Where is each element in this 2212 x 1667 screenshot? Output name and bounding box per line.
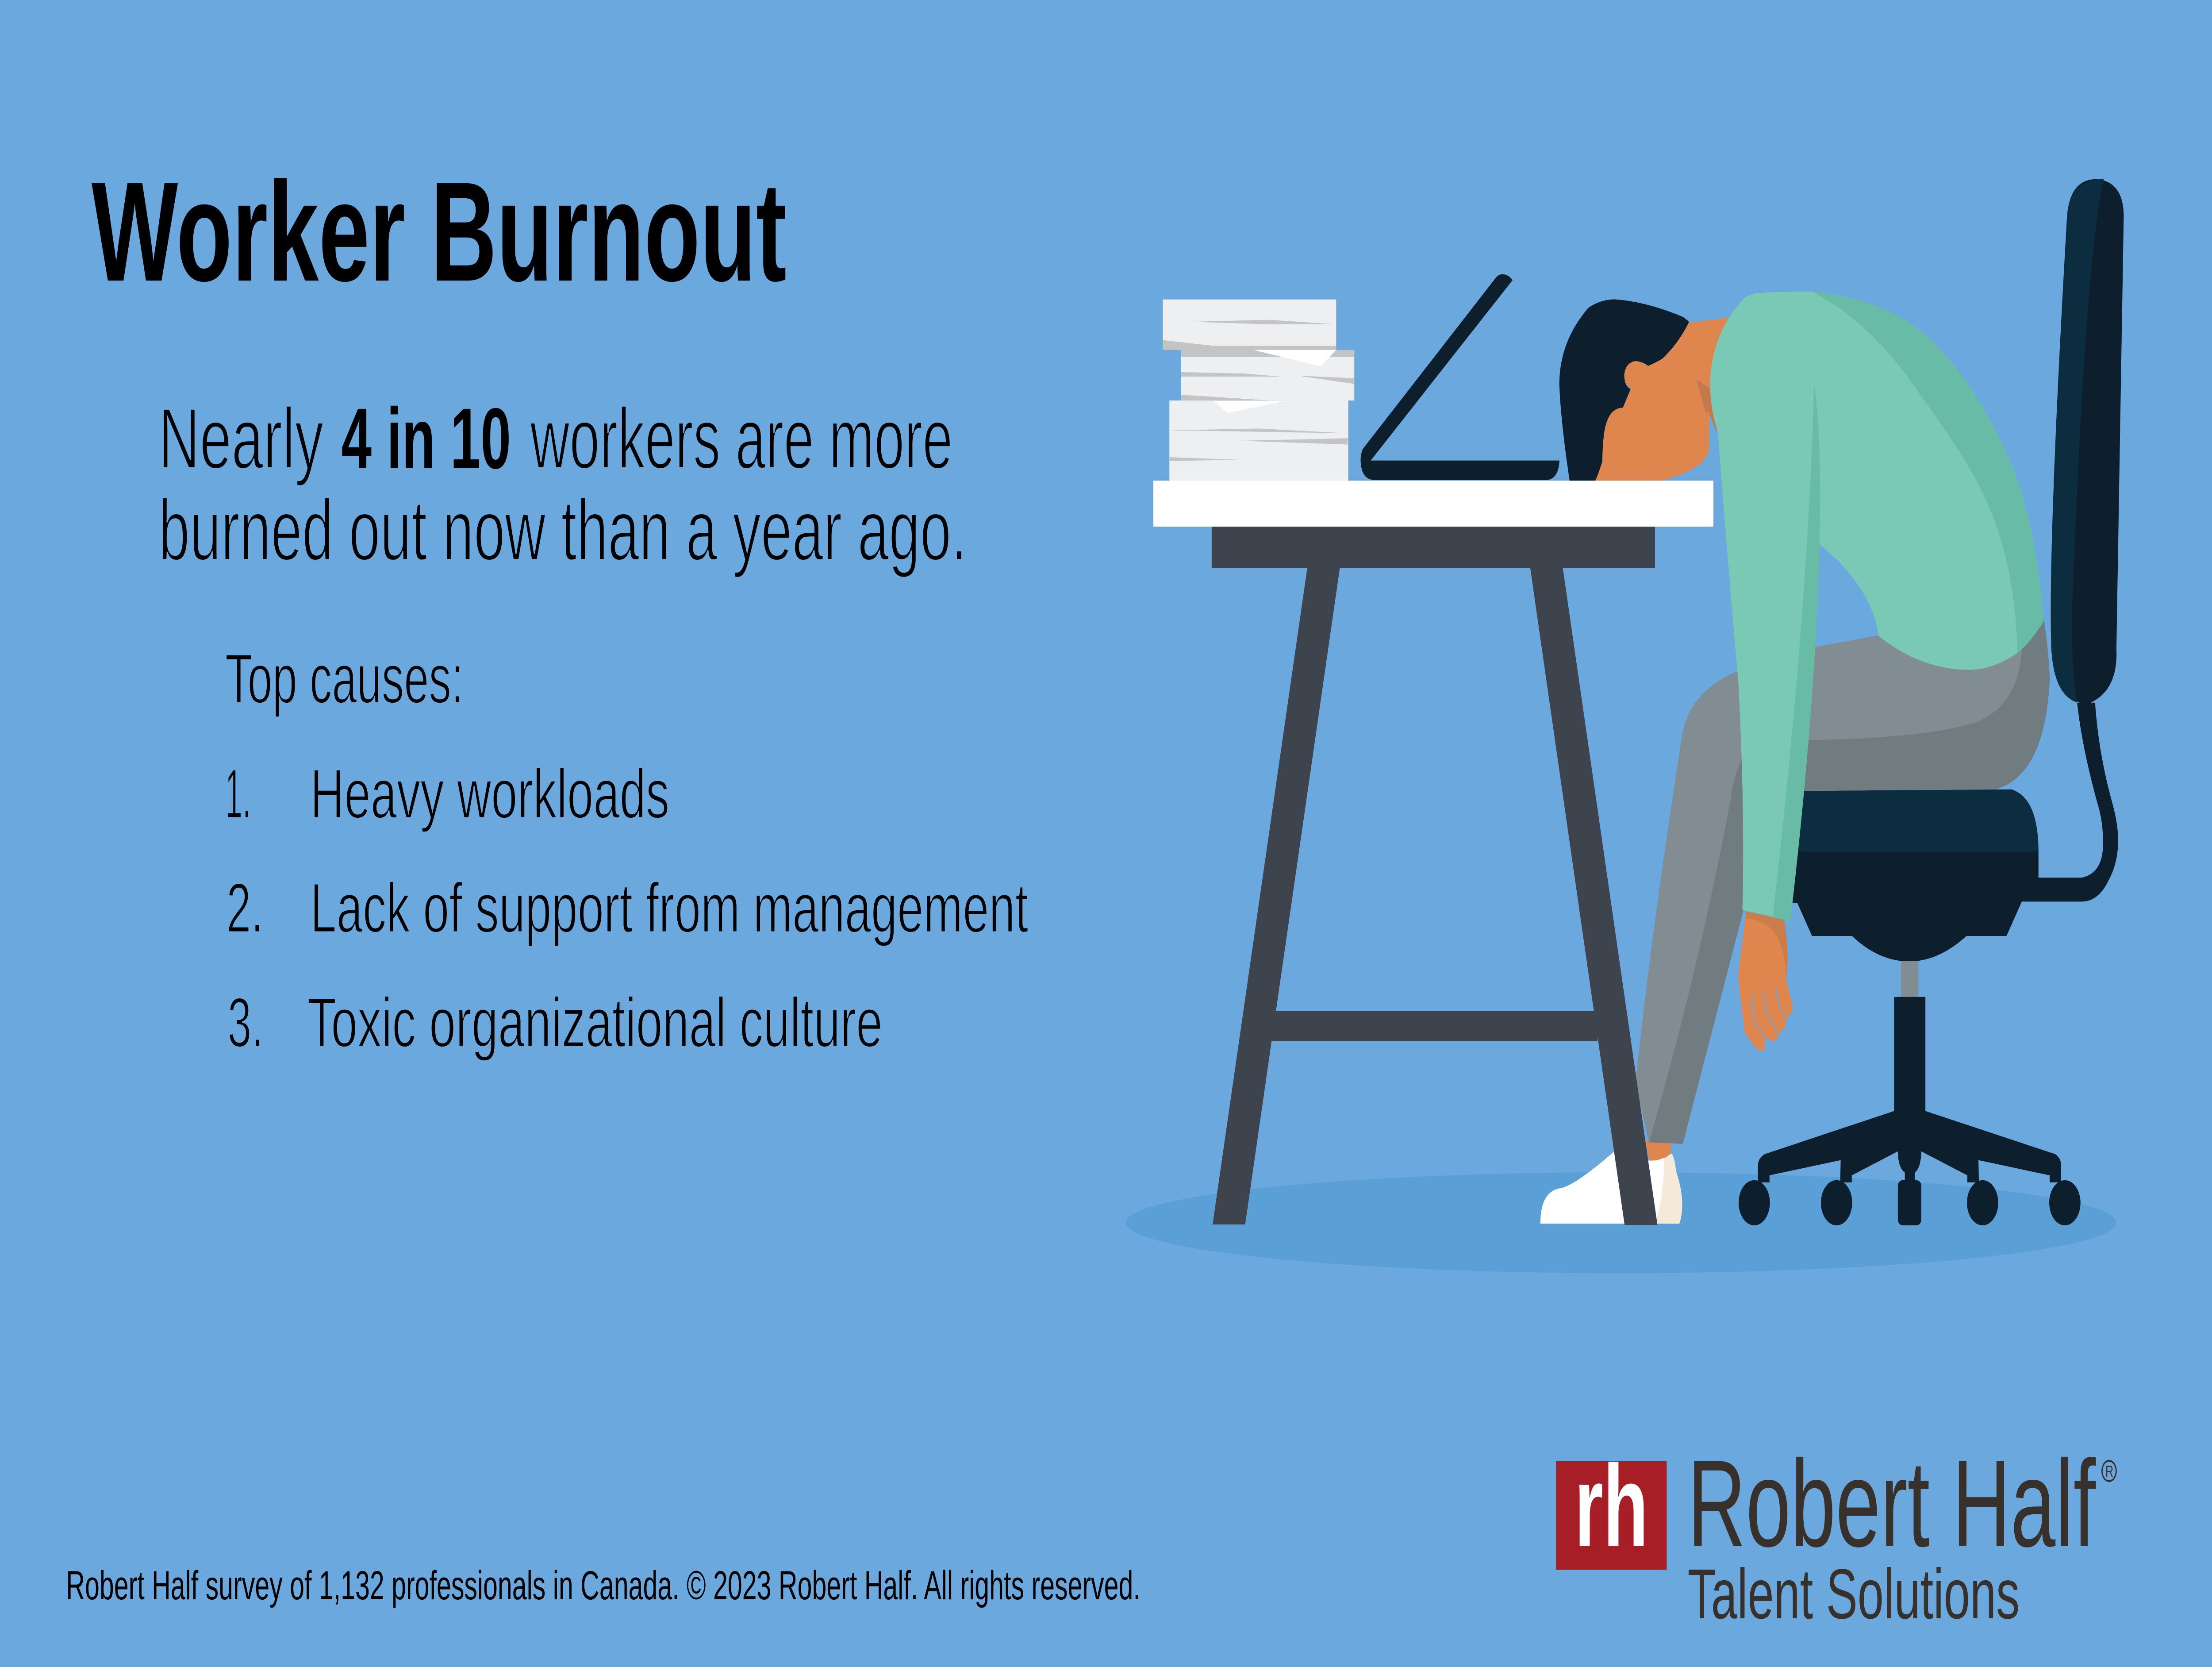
chair seat and arm support bbox=[1792, 703, 2118, 962]
headline statistic text: burned out now than a year ago. bbox=[158, 481, 967, 578]
green sweater bbox=[1710, 292, 2043, 921]
top causes list bbox=[225, 639, 1028, 1062]
office chair bbox=[1739, 179, 2124, 1225]
head and hair bbox=[1559, 300, 1731, 481]
logo mark: rh bbox=[1575, 1441, 1648, 1571]
top causes list: 3. bbox=[228, 983, 263, 1062]
worker slumped over desk bbox=[1540, 292, 2050, 1224]
desk bbox=[1153, 481, 1713, 1225]
desk top bbox=[1153, 481, 1713, 527]
headline statistic text bbox=[158, 390, 967, 578]
headline statistic text: 4 in 10 bbox=[342, 390, 511, 487]
logo wordmark: R bbox=[2105, 1462, 2113, 1480]
logo wordmark: Robert Half bbox=[1688, 1435, 2096, 1572]
top causes list: 1. bbox=[225, 755, 251, 833]
hanging hand bbox=[1738, 912, 1793, 1051]
top causes list: Heavy workloads bbox=[310, 755, 669, 833]
desk legs and crossbar bbox=[1212, 527, 1658, 1225]
source footnote: Robert Half survey of 1,132 professionals in Canada. © 2023 Robert Half. All rights reserved. bbox=[66, 1562, 1141, 1608]
title: Worker Burnout bbox=[92, 153, 787, 311]
top causes list: Top causes: bbox=[225, 639, 464, 718]
logo wordmark bbox=[1688, 1435, 2116, 1634]
foot and shoe bbox=[1540, 1140, 1682, 1224]
top causes list: Toxic organizational culture bbox=[307, 983, 883, 1062]
headline statistic text: workers are more bbox=[530, 390, 952, 487]
stack of papers bbox=[1163, 300, 1354, 481]
chair backrest bbox=[2051, 179, 2124, 705]
headline statistic text: Nearly bbox=[158, 390, 323, 487]
laptop bbox=[1360, 274, 1559, 480]
chair column and wheeled base bbox=[1739, 961, 2081, 1225]
logo wordmark: Talent Solutions bbox=[1688, 1555, 2020, 1634]
top causes list: Lack of support from management bbox=[310, 869, 1028, 947]
top causes list: 2. bbox=[227, 869, 263, 947]
floor shadow bbox=[1126, 1172, 2116, 1273]
Robert Half logo bbox=[1556, 1435, 2116, 1634]
trousers bbox=[1636, 619, 2050, 1144]
